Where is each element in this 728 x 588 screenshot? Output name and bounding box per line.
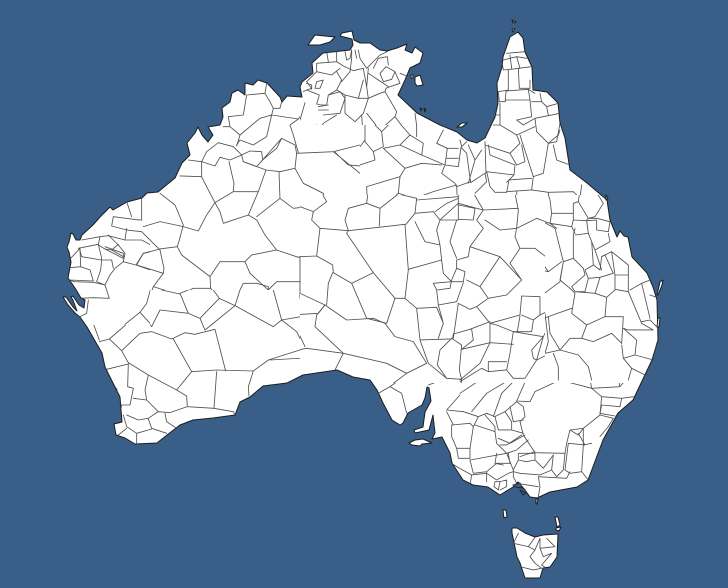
boundaries: north-west (112, 83, 360, 300)
boundaries: Queensland north (360, 51, 582, 195)
mainland Australia (63, 31, 658, 498)
map of Australia with region boundaries (62, 20, 664, 578)
Tasmania (512, 528, 558, 578)
boundaries: interior (300, 195, 545, 383)
boundaries: Top End (300, 50, 417, 125)
region boundaries (68, 50, 657, 570)
Port Phillip and Western Port bays (513, 483, 526, 495)
boundaries: Pilbara and Gascoyne coast (69, 228, 150, 325)
offshore islands (308, 20, 663, 531)
boundaries: south-west (93, 290, 300, 444)
boundaries: south-east (378, 383, 634, 570)
boundaries: Queensland south-east (540, 190, 657, 380)
